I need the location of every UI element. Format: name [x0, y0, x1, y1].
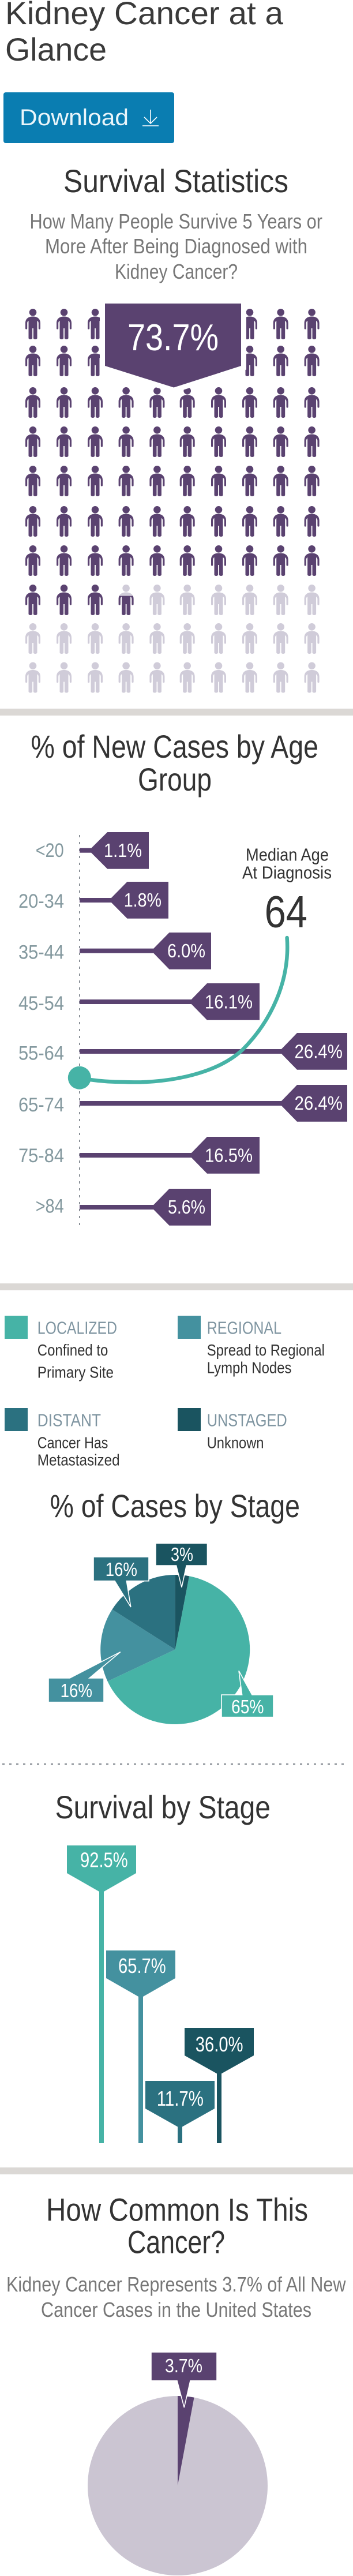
- bar: 35-44: 35-44: [18, 942, 64, 964]
- how common description: Cancer Cases in the United States: [41, 2298, 311, 2322]
- bar: 20-34: 20-34: [18, 890, 64, 912]
- bar: 65-74: 26.4%: [294, 1092, 343, 1114]
- heading: how common: Cancer?: [127, 2224, 225, 2260]
- icon: download arrow: [142, 110, 159, 126]
- label: 65% localized: 65%: [231, 1696, 264, 1717]
- bar: 20-34: 1.8%: [124, 889, 162, 911]
- legend: regional: REGIONAL: [207, 1318, 281, 1338]
- flag: regional 65.7%: 65.7%: [118, 1954, 166, 1978]
- label: 16% distant: [93, 1557, 149, 1607]
- legend: distant: Metastasized: [37, 1451, 120, 1469]
- legend: regional: Lymph Nodes: [207, 1358, 292, 1376]
- heading: how common: [46, 2192, 308, 2260]
- label: 3% unstaged: 3%: [171, 1544, 193, 1565]
- bar: 55-64: 55-64: [18, 1043, 64, 1065]
- legend: distant: [5, 1408, 120, 1469]
- flag: regional 65.7%: [106, 1950, 175, 2143]
- bar: 75-84: [18, 1137, 260, 1174]
- label: 3.7%: 3.7%: [165, 2355, 202, 2376]
- heading: new cases by age group: Group: [138, 761, 212, 797]
- legend: unstaged: Unknown: [207, 1433, 264, 1451]
- how common description: [6, 2272, 346, 2322]
- legend: regional: Spread to Regional: [207, 1341, 325, 1359]
- flag: distant 11.7%: [145, 2081, 215, 2143]
- bar: 65-74: [18, 1085, 347, 1122]
- download button: Download: [20, 105, 129, 130]
- bar: under 20: <20: [36, 840, 64, 862]
- flag: distant 11.7%: 11.7%: [157, 2087, 204, 2110]
- median age pointer curve: [68, 938, 287, 1089]
- heading: new cases by age group: [31, 728, 318, 797]
- pie chart: share of all cancers: [88, 2352, 268, 2575]
- age bar chart: [18, 832, 347, 1226]
- label: 65% localized: [221, 1671, 273, 1717]
- label: 16% regional: [48, 1652, 121, 1702]
- bar: 20-34: [18, 882, 168, 919]
- legend: distant: DISTANT: [37, 1410, 101, 1431]
- flag: localized 92.5%: 92.5%: [80, 1848, 128, 1872]
- heading: cases by stage: % of Cases by Stage: [50, 1488, 300, 1524]
- median age callout: At Diagnosis: [242, 863, 332, 883]
- bar: 75-84: 75-84: [18, 1145, 64, 1167]
- bar: over 84: >84: [36, 1196, 64, 1218]
- bar: 55-64: 26.4%: [294, 1041, 343, 1062]
- median age callout: 64: [265, 886, 307, 937]
- heading: survival by stage: Survival by Stage: [55, 1789, 271, 1825]
- survival question text: More After Being Diagnosed with: [45, 234, 307, 258]
- heading: how common: How Common Is This: [46, 2192, 308, 2227]
- heading: survival statistics: Survival Statistics: [63, 163, 288, 199]
- bar: 45-54: [18, 983, 260, 1020]
- legend: distant: Cancer Has: [37, 1433, 108, 1451]
- flag: localized 92.5%: [67, 1845, 136, 2143]
- pie chart: cases by stage: [48, 1543, 273, 1724]
- bar: 35-44: 6.0%: [167, 940, 205, 961]
- legend: unstaged: UNSTAGED: [207, 1410, 287, 1431]
- people pictogram 73.7%: [25, 309, 320, 692]
- legend: localized: LOCALIZED: [37, 1318, 117, 1338]
- bar: under 20: [36, 832, 149, 869]
- label: 16% regional: 16%: [61, 1680, 92, 1701]
- label: 16% distant: 16%: [106, 1559, 137, 1580]
- flag: unstaged 36.0%: [185, 2028, 254, 2143]
- callout: 73.7%: 73.7%: [127, 316, 219, 358]
- title: [5, 0, 284, 68]
- bar: over 84: 5.6%: [168, 1196, 205, 1218]
- survival question text: [30, 209, 322, 283]
- survival question text: Kidney Cancer?: [115, 260, 238, 283]
- callout: 73.7%: [105, 304, 241, 388]
- label: 3.7%: [151, 2352, 217, 2407]
- median age callout: Median Age: [246, 845, 329, 865]
- flag chart: survival by stage: [67, 1845, 254, 2143]
- bar: 45-54: 45-54: [18, 993, 64, 1014]
- bar: 55-64: [18, 1033, 347, 1070]
- bar: 65-74: 65-74: [18, 1094, 64, 1116]
- title: Glance: [5, 31, 107, 68]
- legend: localized: Primary Site: [37, 1363, 114, 1381]
- legend: stages: [5, 1316, 325, 1469]
- legend: regional: [178, 1316, 325, 1376]
- flag: unstaged 36.0%: 36.0%: [196, 2032, 243, 2056]
- bar: 75-84: 16.5%: [205, 1145, 253, 1166]
- legend: localized: Confined to: [37, 1341, 108, 1359]
- legend: unstaged: [178, 1408, 287, 1451]
- bar: under 20: 1.1%: [104, 840, 142, 861]
- label: 3% unstaged: [156, 1543, 208, 1587]
- median age callout: [242, 845, 332, 937]
- bar: 35-44: [18, 933, 211, 969]
- bar: over 84: [36, 1189, 211, 1226]
- bar: 45-54: 16.1%: [205, 991, 253, 1013]
- download button: [3, 92, 174, 143]
- legend: localized: [5, 1316, 117, 1381]
